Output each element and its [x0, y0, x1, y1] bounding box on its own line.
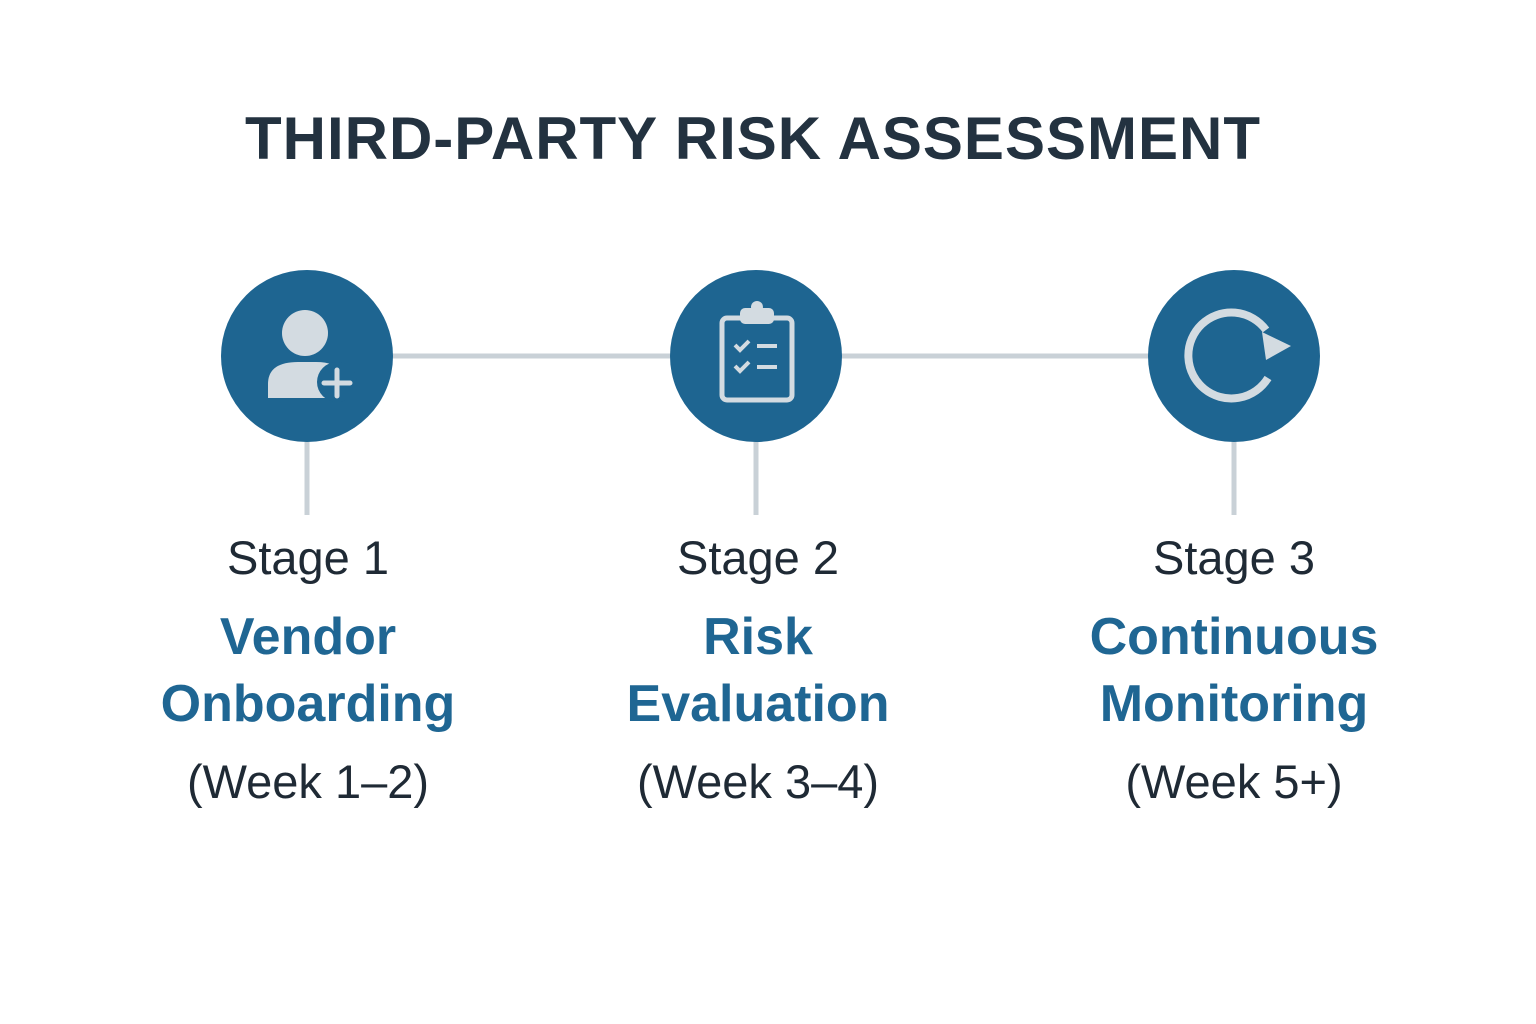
stage 3 text: Stage 3 [1153, 531, 1315, 584]
stage 3 text: Monitoring [1100, 675, 1368, 733]
stage 1 text: (Week 1–2) [187, 755, 429, 808]
stage 3 text [1090, 531, 1378, 808]
icon: add user [221, 270, 393, 442]
stage 2 text: Stage 2 [677, 531, 839, 584]
stage 2 text: (Week 3–4) [637, 755, 879, 808]
connector lines [307, 356, 1234, 515]
icon: clipboard [670, 270, 842, 442]
stage 2 text: Risk [703, 608, 813, 666]
stage 1 text: Vendor [220, 608, 396, 666]
stage 1 text: Stage 1 [227, 531, 389, 584]
stage 1 text [161, 531, 455, 808]
timeline diagram [221, 270, 1320, 515]
stage 3 text: (Week 5+) [1125, 755, 1343, 808]
stage 2 text: Evaluation [627, 675, 889, 733]
title: THIRD-PARTY RISK ASSESSMENT [245, 105, 1261, 172]
stage 3 text: Continuous [1090, 608, 1378, 666]
stage 2 text [627, 531, 889, 808]
icon: refresh [1148, 270, 1320, 442]
stage 1 text: Onboarding [161, 675, 455, 733]
